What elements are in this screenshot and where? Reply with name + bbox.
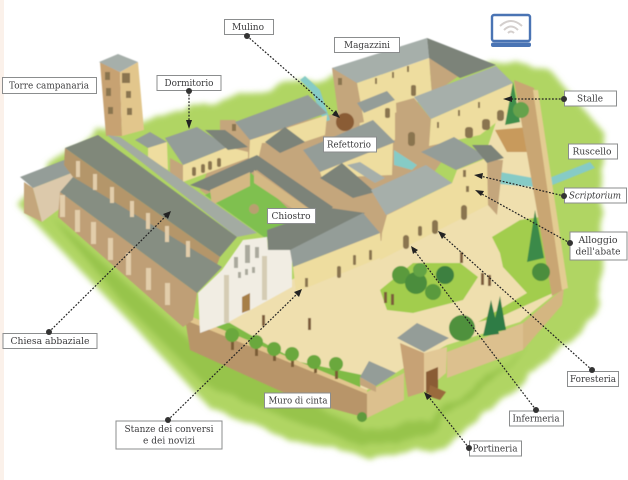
arrow: Infermeria [411,246,539,413]
label: Portineria [470,441,522,456]
arrow: Dormitorio [186,88,192,129]
building: magazzini [332,38,513,150]
cypresses [483,300,499,336]
cloister [190,155,333,240]
label: Alloggio dell'abate: dell'abate [576,246,621,258]
ground: grass [18,62,606,458]
gatehouse [397,323,449,400]
arrow: Foresteria [438,231,595,373]
label: Refettorio [324,137,376,152]
label: Chiostro: Chiostro [272,211,311,222]
label: Mulino [224,20,274,34]
building: north range [220,95,327,160]
aisle wall [58,192,197,327]
west annex [24,182,42,222]
vegetable plot [495,127,537,152]
label: Dormitorio [157,76,221,90]
central garden bushes [392,266,410,284]
arrow: Mulino [244,33,340,118]
arrow: Stalle [503,96,567,102]
buttresses [60,195,170,305]
label: Chiesa abbaziale [3,334,97,348]
label: Alloggio dell'abate [570,232,627,260]
nave roof [65,135,237,257]
monks and figures [262,252,491,330]
label: Magazzini [334,38,400,52]
building: central refectory block [258,120,395,230]
label: Torre campanaria [2,78,96,94]
label: Portineria: Portineria [472,444,518,454]
label: Foresteria: Foresteria [570,374,616,385]
stream [300,76,595,188]
label: Ruscello [568,144,618,159]
label: Scriptorium [564,188,626,203]
icon: laptop with wifi [491,15,531,47]
trees [225,82,550,422]
water wheel [336,113,354,131]
enclosure wall [185,80,568,418]
label: Muro di cinta [264,393,330,408]
abbey illustration [20,38,595,422]
label: Stalle: Stalle [577,94,603,104]
label: Magazzini: Magazzini [344,40,390,51]
facade [198,237,292,333]
label: Infermeria [510,411,564,426]
label: Foresteria [568,372,618,386]
shed [360,361,396,392]
lawn by the church [192,322,362,388]
label: Chiesa abbaziale: Chiesa abbaziale [10,336,90,347]
label: Alloggio dell'abate: Alloggio [578,235,618,246]
label: Scriptorium: Scriptorium [569,190,621,202]
central building backfill [200,100,450,260]
label: Stanze dei conversi e dei novizi: e dei novizi [143,436,195,446]
aisle roof [60,177,222,293]
building: dormitorio [135,127,248,182]
arrow: Scriptorium [474,173,567,199]
label: Mulino: Mulino [232,22,264,33]
label: Dormitorio: Dormitorio [164,78,214,89]
light roof [107,135,257,237]
label: Chiostro [268,208,316,224]
lawn: right side of courtyard [478,217,563,322]
arrow: Portineria [424,392,472,451]
label: Ruscello: Ruscello [572,146,612,158]
label: Stanze dei conversi e dei novizi: Stanze dei conversi [124,424,214,435]
label: Refettorio: Refettorio [327,140,371,150]
leader lines and arrows [46,33,595,451]
label: Stanze dei conversi e dei novizi [116,421,222,449]
tower [99,54,144,136]
label: Torre campanaria: Torre campanaria [9,80,89,92]
church [20,135,292,333]
clerestory wall [64,148,220,270]
label: Infermeria: Infermeria [512,414,560,424]
courtyard ground [205,90,560,390]
arrow: Chiesa abbaziale [46,211,171,335]
lawn: central [380,263,478,313]
label: Muro di cinta: Muro di cinta [268,396,328,406]
arrow: Alloggio [475,190,573,246]
arrow: Stanze dei conversi [165,289,302,423]
east wing [267,137,504,292]
label: Stalle [564,91,616,106]
